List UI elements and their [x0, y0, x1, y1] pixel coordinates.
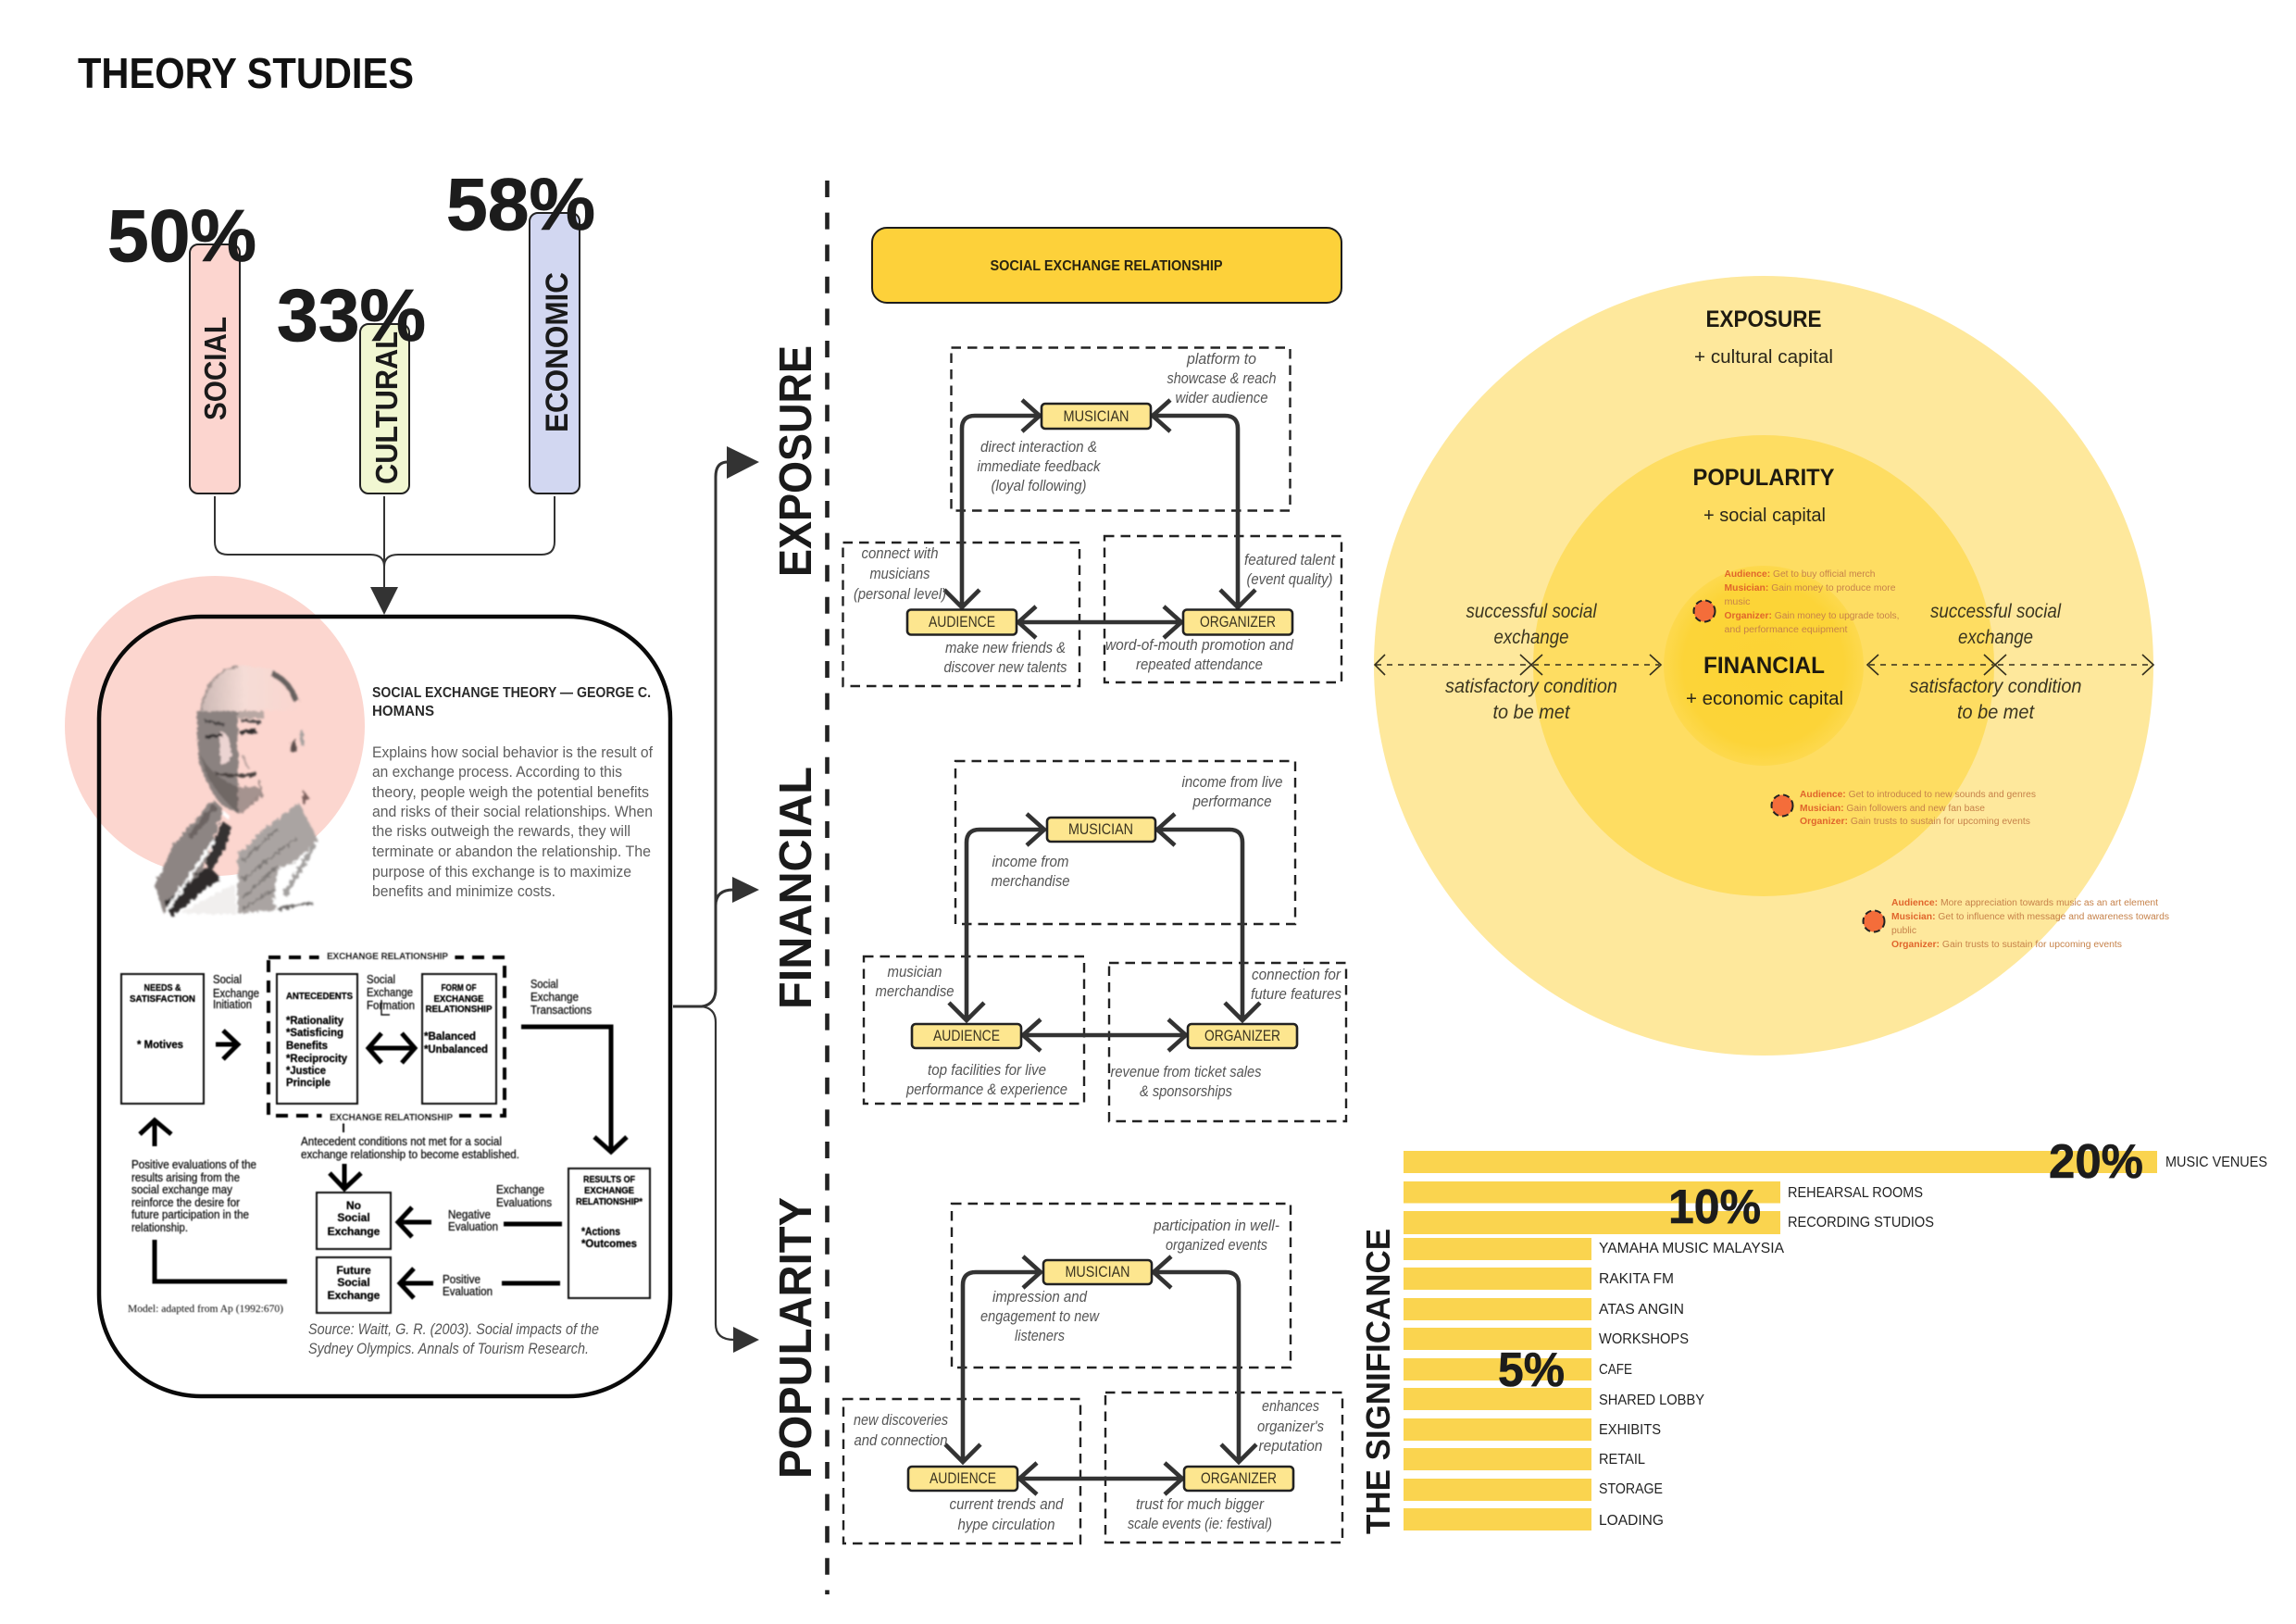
node: musician	[1047, 818, 1155, 842]
arrow: feedback loop	[140, 1120, 287, 1281]
node: audience	[912, 1024, 1021, 1048]
note: exposure benefits: public	[1891, 926, 1916, 936]
source citation	[308, 1320, 599, 1357]
label: financial: + economic capital	[1686, 689, 1843, 709]
bar: social	[190, 244, 240, 493]
source citation: Source: Waitt, G. R. (2003). Social impacts of the	[308, 1320, 599, 1338]
collar and tie	[222, 812, 230, 818]
arrow: bars converge into theory panel	[215, 496, 555, 615]
stat: 33%: 33%	[277, 274, 426, 356]
label: exchange evaluations: Exchange	[496, 1183, 544, 1196]
annotation: participation	[1153, 1218, 1279, 1254]
bar labels: WORKSHOPS	[1599, 1331, 1689, 1347]
stat: 50%: 50%	[107, 194, 256, 277]
body text	[372, 744, 653, 900]
note: exposure benefits	[1863, 898, 2169, 950]
callout: left condition text: exchange	[1494, 627, 1568, 648]
label: social exchange initiation: Social	[213, 973, 242, 986]
label: social exchange transactions: Exchange	[530, 991, 579, 1004]
annotation: top facilities: top facilities for live	[928, 1062, 1046, 1079]
label: social exchange formation: Formation	[367, 999, 415, 1012]
box: antecedents: Benefits	[286, 1039, 328, 1052]
note: financial benefits	[1694, 569, 1900, 635]
annotation: direct interaction: direct interaction &	[980, 439, 1097, 456]
annotation: current trends	[950, 1496, 1064, 1533]
label: exchange evaluations: Negative	[448, 1208, 491, 1221]
annotation: revenue	[1111, 1064, 1261, 1100]
callout: left condition text: satisfactory condition	[1445, 676, 1617, 697]
annotation: new discoveries: and connection	[854, 1432, 948, 1449]
annotation: make new friends: make new friends &	[945, 640, 1066, 656]
body text: the risks outweigh the rewards, they will	[372, 823, 630, 840]
box: results of exchange relationship	[568, 1168, 650, 1298]
arrows	[949, 814, 1260, 1051]
note: positive evaluations: Positive evaluations of the	[131, 1158, 256, 1171]
note: financial benefits: Musician: Gain money to produce more	[1724, 583, 1896, 593]
label: exchange evaluations: Positive	[443, 1273, 480, 1286]
annotation: new discoveries	[854, 1412, 948, 1449]
body text: purpose of this exchange is to maximize	[372, 864, 631, 881]
node: organizer	[1188, 1024, 1297, 1048]
brows eyes mouth	[204, 720, 261, 725]
chart: concentric circles	[1374, 276, 2169, 1056]
box: needs and satisfaction: NEEDS &	[144, 982, 181, 993]
annotation: connect with musicians: (personal level)	[854, 586, 946, 603]
rounded panel outline	[99, 617, 670, 1396]
node: organizer: ORGANIZER	[1200, 613, 1276, 631]
pink circle backdrop	[65, 576, 365, 876]
arrow: transactions to results	[521, 1027, 627, 1152]
annotation: direct interaction: (loyal following)	[991, 478, 1087, 494]
body text: benefits and minimize costs.	[372, 883, 555, 900]
dashed box: exchange relationship	[268, 950, 505, 1123]
box: needs and satisfaction: * Motives	[137, 1038, 183, 1051]
heading: the significance: THE SIGNIFICANCE	[1359, 1229, 1397, 1534]
annotation: featured talent	[1244, 552, 1336, 588]
box: no social exchange: Social	[337, 1211, 370, 1224]
note: popularity benefits: Musician: Gain followers and new fan base	[1800, 804, 1985, 814]
bar labels: ATAS ANGIN	[1599, 1302, 1684, 1318]
callout: right condition text: to be met	[1957, 702, 2035, 723]
portrait of George C. Homans	[155, 666, 318, 917]
annotation: word of mouth: word-of-mouth promotion and	[1105, 637, 1294, 654]
annotation: connection for future features: future features	[1251, 986, 1341, 1003]
annotation: participation: participation in well-	[1153, 1218, 1279, 1234]
annotation: make new friends: discover new talents	[944, 659, 1067, 676]
note: popularity benefits	[1772, 790, 2036, 827]
note: antecedent conditions: exchange relationship to become established.	[301, 1148, 519, 1161]
annotation: connection for future features: connection for	[1252, 967, 1341, 983]
box: antecedents: *Rationality	[286, 1014, 343, 1027]
suit right	[238, 803, 318, 914]
suit left	[155, 799, 222, 914]
bar labels: LOADING	[1599, 1513, 1664, 1529]
label: exchange evaluations: Evaluation	[448, 1220, 498, 1233]
header: social exchange relationship	[872, 228, 1341, 303]
box: form of exchange relationship: FORM OF	[441, 982, 477, 993]
annotation: enhances reputation	[1257, 1398, 1324, 1455]
box: antecedents: *Satisficing	[286, 1026, 343, 1039]
note: model adaptation: Model: adapted from Ap (1992:670)	[128, 1304, 283, 1315]
annotation: income from merchandise	[991, 854, 1070, 890]
annotation: top facilities	[905, 1062, 1067, 1098]
marker	[1863, 911, 1885, 931]
arrow: down to no exchange	[330, 1164, 361, 1189]
arrow: left dashed double arrow	[1375, 655, 1661, 675]
annotation: connect with musicians	[854, 545, 946, 603]
header: social exchange relationship: SOCIAL EXCHANGE RELATIONSHIP	[991, 258, 1223, 274]
right of face shading	[238, 787, 262, 813]
arrows	[945, 1256, 1256, 1494]
annotation: platform: platform to	[1186, 351, 1256, 368]
label: exposure: EXPOSURE	[1705, 306, 1822, 332]
body text: Explains how social behavior is the result of	[372, 744, 653, 761]
annotation: income from live performance: income from live	[1181, 774, 1283, 791]
annotation: connect with musicians: musicians	[870, 566, 930, 582]
annotation: participation: organized events	[1166, 1237, 1267, 1254]
body text: and risks of their social relationships. When	[372, 804, 653, 820]
node: organizer	[1183, 609, 1292, 635]
dashed divider	[825, 181, 830, 1594]
panel: social exchange theory	[65, 576, 670, 1396]
annotation: trust: scale events (ie: festival)	[1128, 1516, 1272, 1532]
annotation: platform: showcase & reach	[1167, 370, 1276, 387]
box: future social exchange	[317, 1257, 391, 1313]
note: popularity benefits: Audience: Get to introduced to new sounds and genres	[1800, 790, 2036, 800]
callout: right condition text	[1909, 601, 2081, 723]
label: exchange evaluations	[443, 1183, 552, 1298]
chart: significance bars	[1404, 1135, 2267, 1530]
annotation: trust	[1128, 1496, 1272, 1532]
node: musician: MUSICIAN	[1065, 1263, 1129, 1280]
marker	[1694, 600, 1715, 622]
arrow: double headed	[368, 1033, 415, 1063]
ring: financial	[1664, 566, 1864, 766]
box: antecedents: Principle	[286, 1076, 331, 1089]
label: popularity: + social capital	[1703, 506, 1826, 526]
bar labels: RAKITA FM	[1599, 1271, 1674, 1287]
box: results of exchange relationship: RESULTS OF	[583, 1174, 635, 1185]
annotation: impression: impression and	[992, 1289, 1088, 1305]
bar: economic: ECONOMIC	[540, 272, 575, 432]
panel: exposure exchange diagram	[842, 348, 1341, 686]
node: organizer: ORGANIZER	[1201, 1469, 1277, 1487]
annotation: top facilities: performance & experience	[905, 1081, 1067, 1098]
note: antecedent conditions: Antecedent conditions not met for a social	[301, 1135, 502, 1148]
title: THEORY STUDIES	[78, 49, 414, 97]
label: social exchange formation: Exchange	[367, 986, 413, 999]
ring: exposure	[1374, 276, 2153, 1056]
annotation: make new friends	[944, 640, 1067, 676]
annotation: direct interaction	[978, 439, 1101, 494]
box: results of exchange relationship: EXCHANGE	[584, 1185, 634, 1196]
note: popularity benefits: Organizer: Gain trusts to sustain for upcoming events	[1800, 817, 2030, 827]
bar labels: CAFE	[1599, 1362, 1632, 1378]
arrow: right dashed double arrow	[1867, 655, 2153, 675]
arrows: evaluations	[398, 1207, 562, 1298]
annotation: enhances reputation: enhances	[1262, 1398, 1319, 1415]
box: form of exchange relationship: RELATIONSHIP	[426, 1004, 493, 1015]
theme label: exposure: EXPOSURE	[771, 345, 821, 577]
node: musician: MUSICIAN	[1063, 407, 1129, 425]
box: form of exchange relationship: EXCHANGE	[433, 993, 483, 1005]
node: organizer: ORGANIZER	[1204, 1027, 1280, 1044]
bars	[1404, 1151, 2157, 1530]
box: antecedents	[277, 974, 357, 1104]
annotation: connection for future features	[1251, 967, 1341, 1003]
annotation: revenue: revenue from ticket sales	[1111, 1064, 1261, 1081]
bar labels: EXHIBITS	[1599, 1422, 1661, 1438]
panel: popularity exchange diagram	[843, 1204, 1342, 1543]
note: financial benefits: music	[1724, 597, 1750, 607]
box: needs and satisfaction: SATISFACTION	[130, 993, 195, 1005]
annotation: featured talent: featured talent	[1244, 552, 1336, 568]
node: audience: AUDIENCE	[929, 613, 995, 631]
node: audience	[907, 609, 1017, 635]
panel: financial exchange diagram	[864, 761, 1346, 1121]
note: antecedent conditions	[301, 1135, 519, 1161]
note: exposure benefits: Organizer: Gain trusts to sustain for upcoming events	[1891, 940, 2122, 950]
box: no social exchange	[317, 1193, 391, 1249]
callout: left condition text: to be met	[1492, 702, 1571, 723]
annotation: enhances reputation: organizer's	[1257, 1418, 1324, 1435]
annotation: current trends: hype circulation	[957, 1517, 1055, 1533]
annotation: current trends: current trends and	[950, 1496, 1064, 1513]
stem to antecedent note	[343, 1123, 344, 1132]
dashed box: exchange relationship: EXCHANGE RELATIONSHIP	[330, 1112, 453, 1123]
callout: right condition text: exchange	[1958, 627, 2033, 648]
annotation: connect with musicians: connect with	[861, 545, 939, 562]
bar: cultural	[360, 324, 409, 493]
box: needs and satisfaction	[121, 974, 204, 1104]
label: financial	[1686, 653, 1843, 709]
bar: economic	[530, 213, 580, 493]
callout: left condition text: successful social	[1466, 601, 1598, 622]
annotation: musician merchandise: merchandise	[876, 983, 954, 1000]
bar labels: MUSIC VENUES	[2165, 1155, 2267, 1170]
arrow: initiation	[216, 1031, 238, 1059]
label: exposure: + cultural capital	[1694, 347, 1833, 368]
annotation: word of mouth: repeated attendance	[1136, 656, 1263, 673]
node: audience	[908, 1467, 1017, 1491]
label: popularity: POPULARITY	[1692, 465, 1835, 491]
label: social exchange initiation: Initiation	[213, 998, 252, 1011]
note: exposure benefits: Musician: Get to influence with message and awareness towards	[1891, 912, 2169, 922]
note: exposure benefits: Audience: More appreciation towards music as an art element	[1891, 898, 2158, 908]
annotation: musician merchandise: musician	[887, 964, 942, 981]
ear	[291, 739, 296, 752]
panel: capital bars	[107, 163, 595, 615]
stat: 20%: 20%	[2049, 1135, 2143, 1189]
heading	[372, 685, 651, 719]
note: positive evaluations: future participation in the	[131, 1208, 249, 1221]
label: social exchange initiation	[213, 973, 259, 1011]
note: financial benefits: Organizer: Gain money to upgrade tools,	[1724, 611, 1900, 621]
box: form of exchange relationship: *Unbalanced	[424, 1043, 488, 1056]
annotation: impression	[980, 1289, 1100, 1344]
stat: 5%: 5%	[1498, 1343, 1565, 1397]
stat: 10%: 10%	[1668, 1181, 1761, 1234]
annotation: income from merchandise: income from	[992, 854, 1068, 870]
annotation: income from live performance: performance	[1192, 793, 1272, 810]
annotation: platform: wider audience	[1176, 390, 1268, 406]
annotation: impression: listeners	[1015, 1328, 1065, 1344]
heading: HOMANS	[372, 704, 434, 719]
annotation: trust: trust for much bigger	[1136, 1496, 1265, 1513]
label: exchange evaluations: Evaluations	[496, 1196, 552, 1209]
bar: cultural: CULTURAL	[369, 331, 404, 484]
exchange model diagram	[121, 950, 650, 1315]
note: positive evaluations: reinforce the desire for	[131, 1196, 240, 1209]
bar labels: STORAGE	[1599, 1481, 1663, 1497]
annotation: musician merchandise	[876, 964, 954, 1000]
theme label: financial: FINANCIAL	[771, 767, 821, 1009]
annotation: enhances reputation: reputation	[1259, 1438, 1322, 1455]
body text: terminate or abandon the relationship. The	[372, 843, 651, 860]
label: social exchange formation: Social	[367, 973, 395, 986]
bar labels: RETAIL	[1599, 1452, 1645, 1468]
forehead and upper head	[201, 666, 297, 711]
body text: an exchange process. According to this	[372, 764, 622, 781]
label: exchange evaluations: Evaluation	[443, 1285, 493, 1298]
heading: SOCIAL EXCHANGE THEORY — GEORGE C.	[372, 685, 651, 701]
body text: theory, people weigh the potential benefits	[372, 784, 649, 801]
bar labels: YAMAHA MUSIC MALAYSIA	[1599, 1241, 1784, 1256]
note: positive evaluations: results arising from the	[131, 1171, 240, 1184]
annotation: impression: engagement to new	[980, 1308, 1100, 1325]
ring: popularity	[1533, 435, 1994, 896]
note: positive evaluations: social exchange may	[131, 1183, 233, 1196]
marker	[1772, 794, 1792, 817]
box: antecedents: *Reciprocity	[286, 1052, 347, 1065]
annotation: platform	[1167, 351, 1276, 406]
theme label: popularity: POPULARITY	[771, 1197, 821, 1479]
annotation: direct interaction: immediate feedback	[978, 458, 1101, 475]
box: results of exchange relationship: RELATIONSHIP*	[576, 1196, 643, 1207]
box: future social exchange: Social	[337, 1276, 370, 1289]
node: musician: MUSICIAN	[1068, 820, 1133, 838]
box: no social exchange: No	[346, 1199, 361, 1212]
dashed box: exchange relationship: EXCHANGE RELATIONSHIP	[327, 951, 448, 962]
annotation: income from merchandise: merchandise	[991, 873, 1070, 890]
box: antecedents: *Justice	[286, 1064, 326, 1077]
label: social exchange initiation: Exchange	[213, 987, 259, 1000]
stat: 58%: 58%	[446, 163, 595, 245]
label: social exchange formation	[367, 973, 415, 1015]
note: positive evaluations: relationship.	[131, 1221, 188, 1234]
source citation: Sydney Olympics. Annals of Tourism Research.	[308, 1340, 589, 1357]
box: results of exchange relationship: *Outcomes	[581, 1237, 637, 1250]
annotation: income from live performance	[1181, 774, 1283, 810]
shadowed left of face	[197, 711, 238, 813]
box: future social exchange: Exchange	[328, 1289, 381, 1302]
bar labels: REHEARSAL ROOMS	[1788, 1185, 1923, 1201]
callout: right condition text: successful social	[1930, 601, 2062, 622]
label: social exchange transactions	[530, 978, 592, 1017]
box: form of exchange relationship: *Balanced	[424, 1030, 476, 1043]
node: musician	[1043, 1260, 1152, 1284]
annotation: revenue: & sponsorships	[1140, 1083, 1232, 1100]
label: popularity	[1692, 465, 1835, 526]
bar labels: SHARED LOBBY	[1599, 1393, 1704, 1408]
label: exposure	[1694, 306, 1833, 368]
box: future social exchange: Future	[336, 1264, 371, 1277]
box: form of exchange relationship	[422, 974, 496, 1104]
callout: right condition text: satisfactory condition	[1909, 676, 2081, 697]
box: results of exchange relationship: *Actions	[581, 1225, 620, 1238]
arrow: bracket to three themes	[673, 446, 759, 1353]
annotation: new discoveries: new discoveries	[854, 1412, 948, 1429]
label: social exchange transactions: Social	[530, 978, 558, 991]
arrows	[944, 400, 1255, 638]
node: audience: AUDIENCE	[930, 1469, 996, 1487]
bar labels: RECORDING STUDIOS	[1788, 1215, 1934, 1230]
label: financial: FINANCIAL	[1703, 653, 1825, 679]
note: positive evaluations	[131, 1158, 256, 1234]
node: organizer	[1184, 1467, 1293, 1491]
node: musician	[1042, 404, 1151, 429]
annotation: word of mouth	[1105, 637, 1294, 673]
bar: social: SOCIAL	[198, 317, 232, 420]
note: financial benefits: Audience: Get to buy official merch	[1724, 569, 1876, 580]
note: financial benefits: and performance equipment	[1724, 625, 1848, 635]
box: antecedents: ANTECEDENTS	[286, 991, 353, 1002]
callout: left condition text	[1445, 601, 1617, 723]
node: audience: AUDIENCE	[933, 1027, 1000, 1044]
annotation: featured talent: (event quality)	[1246, 571, 1333, 588]
bar labels	[1599, 1155, 2267, 1529]
label: social exchange transactions: Transactions	[530, 1004, 592, 1017]
box: no social exchange: Exchange	[328, 1225, 381, 1238]
